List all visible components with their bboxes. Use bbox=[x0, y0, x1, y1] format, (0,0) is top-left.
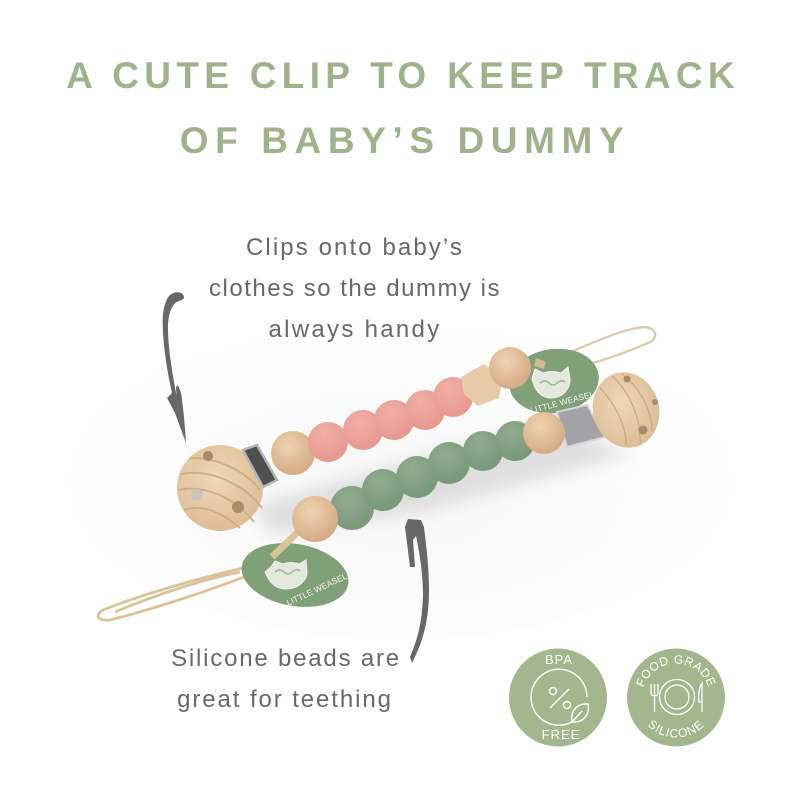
wooden clip left bbox=[177, 445, 263, 531]
text: beads callout: Silicone beads are bbox=[171, 645, 401, 672]
beads bbox=[271, 431, 315, 475]
arrow: to beads bbox=[405, 519, 429, 663]
tag: rear logo tag bbox=[505, 327, 655, 419]
icon: leaf bbox=[572, 704, 588, 722]
metal clip right bbox=[557, 405, 605, 447]
beads bbox=[330, 486, 374, 530]
tag: front logo tag bbox=[98, 535, 354, 620]
text: clip callout: always handy bbox=[268, 316, 442, 343]
text: clip callout bbox=[209, 234, 501, 343]
badge: food grade silicone: SILICONE bbox=[648, 720, 704, 738]
text: clip callout: Clips onto baby’s bbox=[246, 234, 464, 261]
arrow: to clip bbox=[163, 292, 186, 443]
badge: BPA free: FREE bbox=[542, 727, 580, 742]
text: beads callout: great for teething bbox=[177, 686, 393, 713]
title: A CUTE CLIP TO KEEP TRACK bbox=[66, 55, 740, 96]
green clip strand bbox=[98, 365, 668, 620]
tag: front logo tag: LITTLE WEASEL bbox=[285, 571, 349, 608]
metal clip left bbox=[243, 445, 277, 487]
wooden clip right bbox=[584, 365, 668, 455]
tag: rear logo tag: LITTLE WEASEL bbox=[529, 389, 595, 415]
pink clip strand bbox=[177, 327, 655, 531]
shadows bbox=[255, 420, 630, 535]
text: beads callout bbox=[171, 645, 401, 713]
text: clip callout: clothes so the dummy is bbox=[209, 275, 501, 302]
badge: food grade silicone: FOOD GRADE bbox=[636, 655, 716, 687]
badge: food grade silicone bbox=[627, 648, 725, 746]
cord knot bbox=[272, 532, 298, 557]
title bbox=[66, 55, 740, 161]
badge: BPA free: BPA bbox=[545, 652, 573, 667]
icon: plate and cutlery bbox=[651, 680, 702, 714]
badge: BPA free bbox=[509, 648, 607, 746]
title: OF BABY’S DUMMY bbox=[180, 120, 630, 161]
